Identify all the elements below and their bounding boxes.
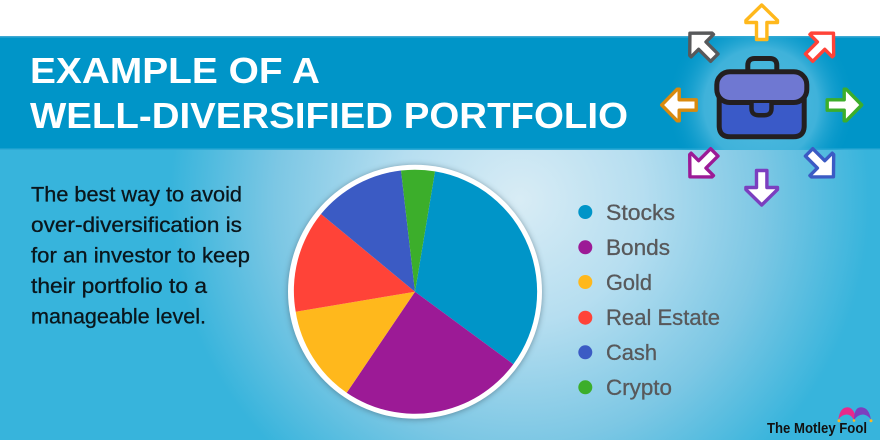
- legend: stocks: Stocks: [606, 200, 675, 225]
- slice: gold: [296, 292, 415, 393]
- legend: cash: Cash: [606, 340, 657, 365]
- legend: crypto: Crypto: [606, 375, 672, 400]
- logo: The Motley Fool: [767, 407, 872, 437]
- legend: stocks: [578, 200, 675, 225]
- logo: The Motley Fool: The Motley Fool: [767, 421, 867, 437]
- slice: real estate: [294, 214, 415, 312]
- body text: their portfolio to a: [31, 275, 207, 298]
- legend: bonds: [578, 235, 670, 260]
- slice: bonds: [347, 292, 513, 414]
- slice: stocks: [415, 171, 537, 364]
- body text: over-diversification is: [31, 214, 242, 237]
- title: EXAMPLE OF A: [30, 50, 320, 91]
- body text: [31, 184, 250, 328]
- legend: [578, 200, 720, 400]
- pie chart: [288, 165, 542, 420]
- legend: gold: Gold: [606, 270, 652, 295]
- legend: crypto: [578, 375, 672, 400]
- body text: for an investor to keep: [31, 245, 250, 268]
- legend: real estate: Real Estate: [606, 305, 720, 330]
- title: WELL-DIVERSIFIED PORTFOLIO: [30, 95, 628, 136]
- legend: gold: [578, 270, 652, 295]
- body text: The best way to avoid: [31, 184, 242, 207]
- title banner: [0, 36, 880, 150]
- icon: jester hat: [838, 407, 872, 422]
- slice: crypto: [401, 170, 435, 292]
- title: [30, 50, 628, 136]
- body text: manageable level.: [31, 305, 206, 328]
- legend: bonds: Bonds: [606, 235, 670, 260]
- icon: diverging arrows: [662, 5, 862, 205]
- legend: cash: [578, 340, 657, 365]
- icon: briefcase: [717, 58, 807, 137]
- slice: cash: [321, 170, 415, 292]
